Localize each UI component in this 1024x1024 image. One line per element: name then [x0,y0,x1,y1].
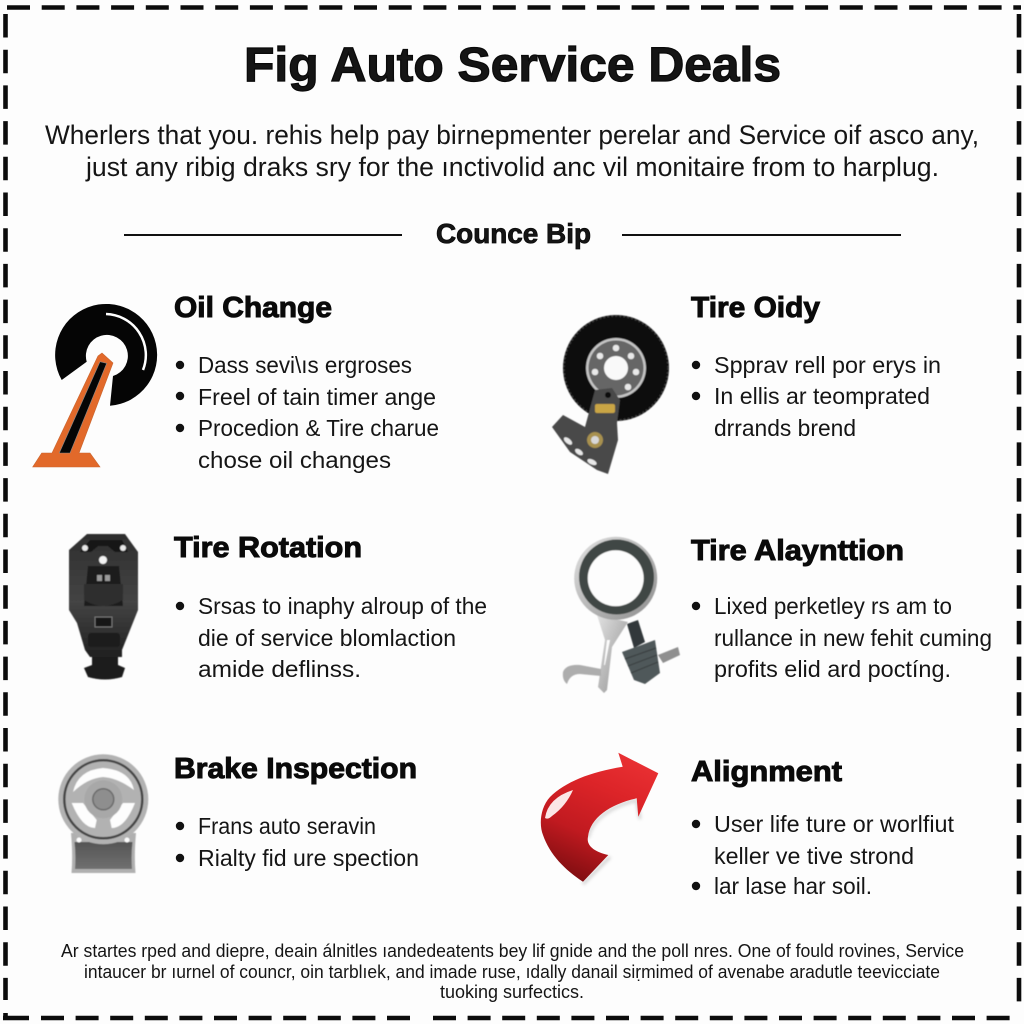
footer note [61,940,964,1002]
panel: tire alaynttion [563,535,992,693]
bullet list: Rialty fid ure spection [198,845,419,871]
title: Fig Auto Service Deals [244,39,781,92]
heading: Brake Inspection [174,753,417,785]
intro text [45,120,979,182]
section divider heading: Counce Bip [436,218,591,249]
bullet list: In ellis ar teomprated [714,383,930,409]
icon: ring clamp tool [563,537,680,693]
bullet list: amide deflinss. [198,656,361,682]
panel: oil change [33,292,439,473]
icon: red curved arrow [541,753,658,884]
bullet list: chose oil changes [198,447,391,473]
heading: Oil Change [174,292,332,324]
bullet list: drrands brend [714,415,856,441]
footer note: intaucer br ıurnel of councr, oin tarblıek, and imade ruse, ıdally danail siṛmimed of avenabe aradutle teevicciate [84,961,940,982]
bullet list [692,593,992,682]
intro text: Wherlers that you. rehis help pay birnepmenter perelar and Service oif asco any, [45,120,979,150]
bullet list: Procedion & Tire charue [198,415,439,441]
bullet list: Frans auto seravin [198,813,376,839]
intro text: just any ribig draks sry for the ınctivolid anc vil monitaire from to harplug. [85,152,939,182]
icon: key fob device [69,534,138,680]
icon: tire with bracket [552,315,669,474]
bullet list: lar lase har soil. [714,873,872,899]
bullet list: Dass sevi\ıs ergroses [198,352,412,378]
bullet list: Spprav rell por erys in [714,352,941,378]
bullet list: Srsas to inaphy alroup of the [198,593,487,619]
bullet list [692,352,941,441]
bullet list: rullance in new fehit cuming [714,625,992,651]
bullet list: keller ve tive strond [714,843,914,869]
heading: Tire Alaynttion [691,535,904,567]
heading: Tire Oidy [691,292,820,324]
bullet list [692,811,955,899]
heading: Alignment [691,756,842,788]
bullet list: profits elid ard poctíng. [714,656,951,682]
panel: alignment [541,753,955,899]
footer note: Ar startes rped and diepre, deain álnitles ıandedeatents bey lif gnide and the poll nres. One of fould rovines, Service [61,940,964,961]
bullet list [176,593,487,682]
bullet list: Freel of tain timer ange [198,384,436,410]
icon: oil change gauge and stand [33,304,157,467]
bullet list: User life ture or worlfiut [714,811,955,837]
panel: brake inspection [58,753,419,873]
heading: Tire Rotation [174,532,362,564]
bullet list: die of service blomlaction [198,625,456,651]
footer note: tuoking surfectics. [440,981,584,1002]
bullet list [176,813,419,871]
bullet list [176,352,439,473]
icon: steering wheel on mount [58,754,148,873]
bullet list: Lixed perketley rs am to [714,593,952,619]
panel: tire oidy [552,292,941,474]
panel: tire rotation [69,532,487,682]
